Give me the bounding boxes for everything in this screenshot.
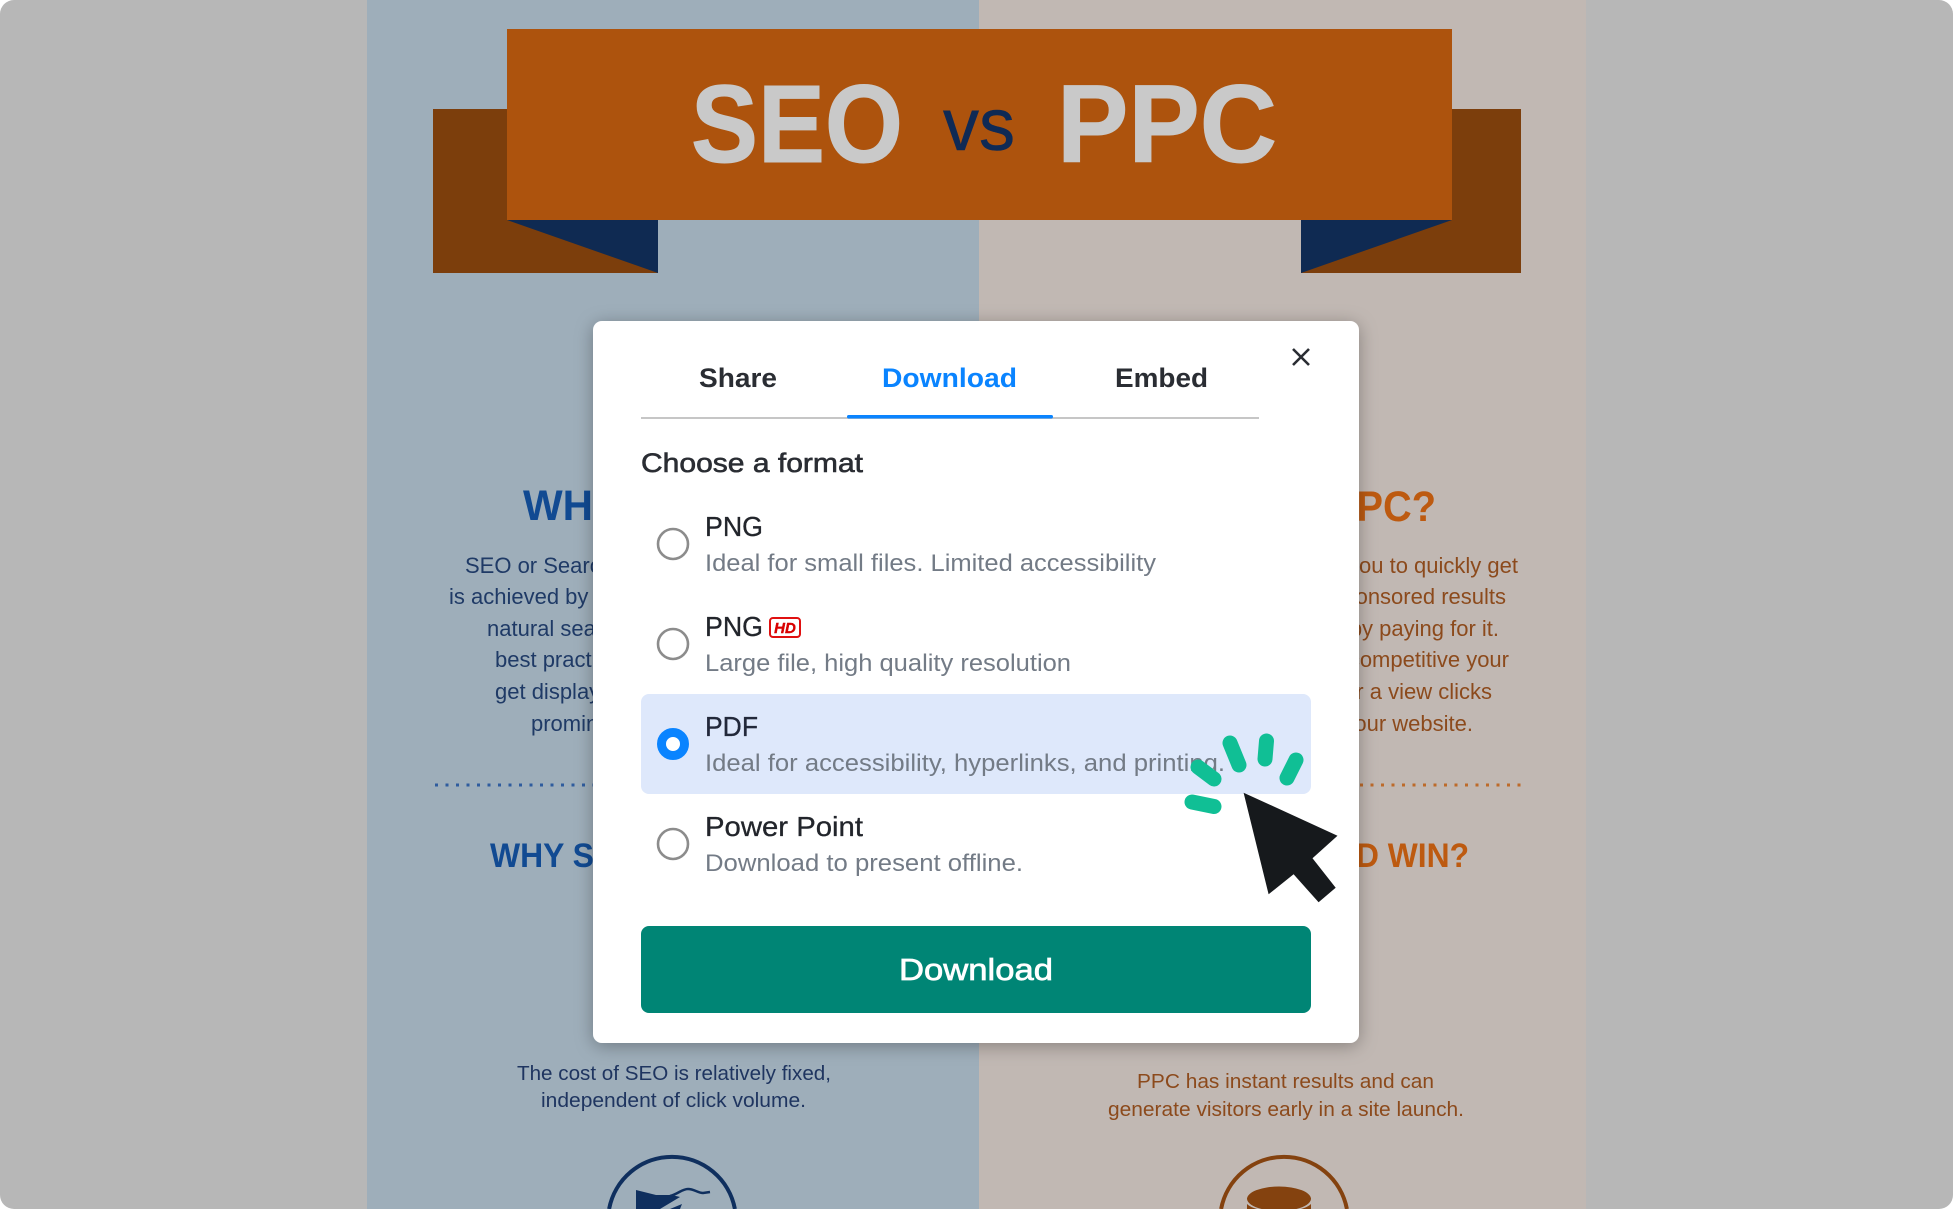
option: PNG bbox=[658, 511, 1156, 577]
SEO description: get displayed bbox=[495, 679, 625, 704]
badge: HD bbox=[770, 618, 800, 637]
SEO description: SEO or Search bbox=[465, 553, 613, 578]
PPC results note: PPC has instant results and can bbox=[1137, 1070, 1434, 1093]
icon: PPC circle with coins bbox=[1221, 1157, 1347, 1209]
option: Power Point: Power Point bbox=[705, 811, 863, 842]
tab underline bbox=[641, 417, 1259, 419]
left ribbon fold bbox=[507, 220, 658, 273]
SEO cost note: The cost of SEO is relatively fixed, bbox=[517, 1062, 831, 1085]
PPC description: by paying for it. bbox=[1350, 616, 1499, 641]
heading: choose a format: Choose a format bbox=[641, 448, 864, 478]
icon: close bbox=[1293, 349, 1309, 365]
title: vs: vs bbox=[943, 83, 1015, 166]
panel: SEO column background bbox=[367, 0, 979, 1209]
SEO description: prominently bbox=[531, 711, 645, 736]
tab bar bbox=[641, 363, 1259, 419]
download button bbox=[641, 926, 1311, 1013]
title: PPC: PPC bbox=[1057, 63, 1277, 186]
download button: Download bbox=[899, 952, 1053, 987]
heading: why SEO: WHY SEO bbox=[490, 837, 640, 875]
option: PDF selected bbox=[641, 694, 1311, 794]
heading: what is SEO: WH bbox=[523, 482, 593, 530]
option: PDF selected: Ideal for accessibility, hyperlinks, and printing. bbox=[705, 750, 1225, 777]
icon: click sparks bbox=[1192, 741, 1296, 806]
dotted divider left bbox=[435, 784, 600, 786]
SEO cost note bbox=[517, 1062, 831, 1112]
SEO column text bbox=[435, 482, 831, 1209]
PPC description: competitive your bbox=[1349, 647, 1509, 672]
PPC description: your website. bbox=[1343, 711, 1473, 736]
title: SEO: SEO bbox=[691, 63, 903, 186]
PPC description bbox=[1332, 553, 1518, 736]
panel: PPC column background bbox=[979, 0, 1586, 1209]
option: PNG HD: PNG bbox=[705, 611, 763, 642]
option: PNG: Ideal for small files. Limited accessibility bbox=[705, 550, 1156, 577]
PPC description: for a view clicks bbox=[1338, 679, 1492, 704]
PPC column text bbox=[1108, 483, 1522, 1209]
option: PDF selected: PDF bbox=[705, 711, 758, 742]
tab: Download: Download bbox=[882, 363, 1017, 393]
tab: Share: Share bbox=[699, 363, 777, 393]
PPC results note: generate visitors early in a site launch. bbox=[1108, 1098, 1464, 1121]
option: PNG HD bbox=[658, 611, 1071, 677]
option: Power Point: Download to present offline. bbox=[705, 850, 1023, 877]
PPC results note bbox=[1108, 1070, 1464, 1121]
icon: SEO circle bbox=[609, 1157, 735, 1209]
SEO description bbox=[449, 553, 645, 736]
left ribbon tail bbox=[433, 109, 658, 273]
PPC description: sponsored results bbox=[1332, 584, 1506, 609]
right ribbon tail bbox=[1301, 109, 1521, 273]
PPC description: you to quickly get bbox=[1348, 553, 1518, 578]
option: PNG: PNG bbox=[705, 511, 763, 542]
title banner bbox=[433, 29, 1521, 273]
option: Power Point bbox=[658, 811, 1023, 877]
modal dialog bbox=[593, 321, 1359, 1043]
heading: what is PPC: PPC? bbox=[1330, 483, 1436, 531]
dotted divider right bbox=[1360, 784, 1522, 786]
right ribbon fold bbox=[1301, 220, 1452, 273]
badge: HD: HD bbox=[774, 620, 796, 637]
icon: mouse cursor bbox=[1244, 793, 1338, 902]
banner face bbox=[507, 29, 1452, 220]
heading: who would win: AND WIN? bbox=[1310, 837, 1469, 875]
active tab indicator bbox=[847, 415, 1053, 418]
tab: Embed: Embed bbox=[1115, 363, 1208, 393]
SEO cost note: independent of click volume. bbox=[541, 1089, 806, 1112]
option: PNG HD: Large file, high quality resolution bbox=[705, 650, 1071, 677]
modal card bbox=[593, 321, 1359, 1043]
SEO description: is achieved by bbox=[449, 584, 588, 609]
SEO description: best practices bbox=[495, 647, 631, 672]
SEO description: natural search bbox=[487, 616, 626, 641]
